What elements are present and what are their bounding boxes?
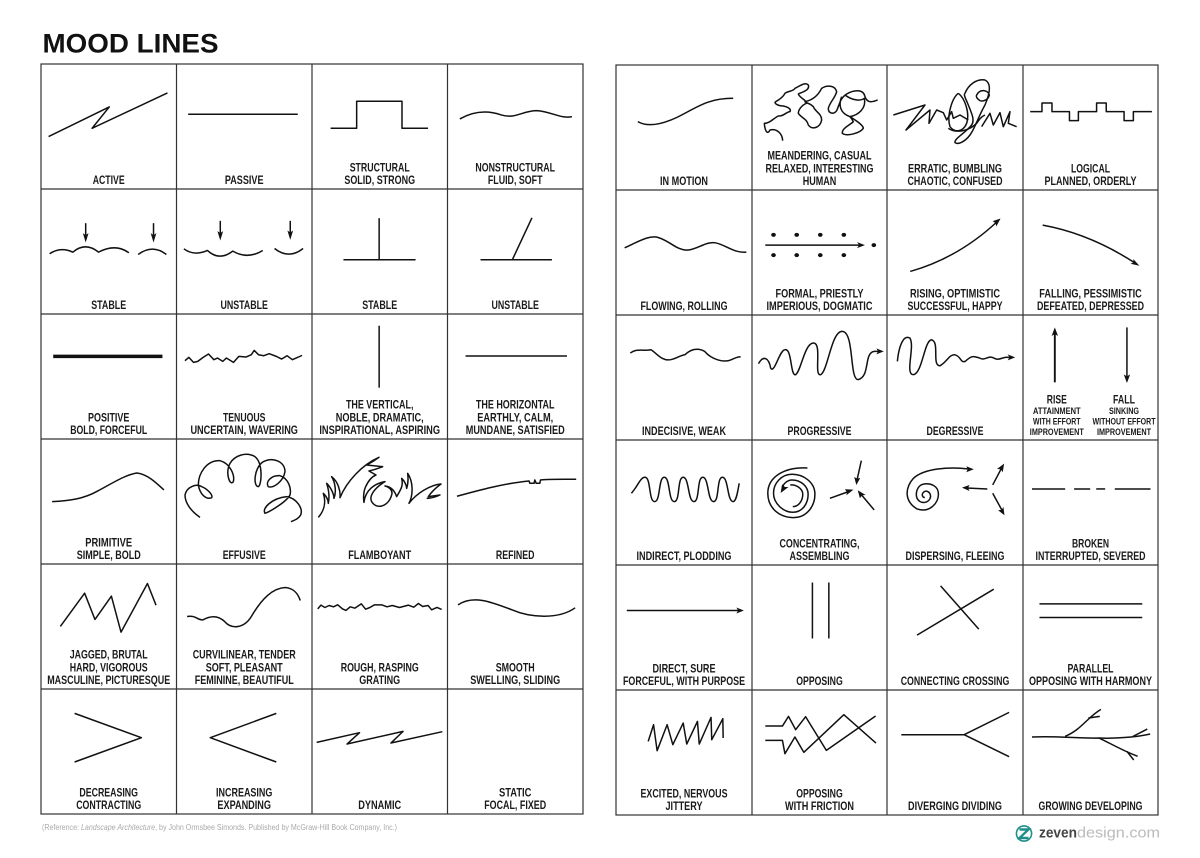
cell: diverging: DIVERGING DIVIDING [908,801,1002,813]
cell: positive: BOLD, FORCEFUL [70,425,147,437]
cell: in motion: IN MOTION [660,176,708,188]
cell: refined: REFINED [496,550,534,562]
cell: primitive [52,473,164,562]
cell: opposing [796,583,843,688]
cell: decreasing: CONTRACTING [76,800,141,812]
cell: progressive: PROGRESSIVE [788,426,852,438]
cell: smooth: SMOOTH [496,662,535,674]
cell: formal: IMPERIOUS, DOGMATIC [766,301,872,313]
cell: dispersing [906,464,1005,563]
cell: rise and fall: IMPROVEMENT [1097,427,1151,438]
cell: static: FOCAL, FIXED [484,800,546,812]
cell: opposing with friction: OPPOSING [796,788,843,800]
cell: rise and fall [1030,327,1156,438]
cell: falling [1037,225,1144,313]
cell: logical [1030,103,1152,188]
cell: opposing with friction [765,715,876,813]
cell: rough [318,603,442,687]
cell: positive [53,356,162,437]
cell: meandering: MEANDERING, CASUAL [768,151,872,163]
cell: jagged: MASCULINE, PICTURESQUE [47,675,170,687]
cell: flowing [625,237,746,313]
cell: rise and fall: FALL [1113,392,1135,406]
cell: flamboyant [318,457,441,562]
cell: indirect: INDIRECT, PLODDING [636,551,732,563]
cell: passive: PASSIVE [225,175,264,187]
cell: nonstructural: FLUID, SOFT [488,175,542,187]
cell: logical: PLANNED, ORDERLY [1044,176,1137,188]
cell: logical: LOGICAL [1071,163,1110,175]
cell: stable arcs [50,223,166,312]
cell: formal [765,233,876,313]
cell: effusive: EFFUSIVE [223,550,266,562]
cell: formal: FORMAL, PRIESTLY [776,288,864,300]
cell: nonstructural [460,111,572,187]
cell: parallel: PARALLEL [1068,663,1114,675]
cell: positive: POSITIVE [88,412,130,424]
cell: connecting crossing: CONNECTING CROSSING [901,676,1009,688]
cell: opposing: OPPOSING [796,676,843,688]
logo: zevendesign [1016,825,1160,842]
cell: flowing: FLOWING, ROLLING [640,301,728,313]
cell: falling: DEFEATED, DEPRESSED [1037,301,1144,313]
title: MOOD LINES [42,28,218,58]
cell: decreasing [75,713,141,812]
cell: direct [623,607,745,688]
cell: rise and fall: ATTAINMENT [1033,406,1081,417]
cell: erratic [893,80,1017,188]
cell: rising: RISING, OPTIMISTIC [910,288,1000,300]
cell: effusive [185,454,301,562]
cell: indirect [631,477,739,563]
cell: parallel [1029,604,1152,688]
cell: concentrating: ASSEMBLING [790,551,850,563]
cell: nonstructural: NONSTRUCTURAL [475,162,555,174]
cell: active: ACTIVE [93,175,125,187]
cell: concentrating: CONCENTRATING, [780,538,860,550]
cell: in motion [638,98,733,188]
cell: tenuous [185,350,302,437]
cell: increasing: EXPANDING [217,800,271,812]
cell: curvilinear [187,588,300,687]
cell: rough: ROUGH, RASPING [341,662,419,674]
cell: unstable leaning: UNSTABLE [491,300,539,312]
cell: jagged: HARD, VIGOROUS [70,662,148,674]
cell: rise and fall: WITH EFFORT [1033,416,1081,428]
wordmark: design.com: design.com [1077,825,1160,842]
cell: structural: STRUCTURAL [350,162,410,174]
cell: smooth: SWELLING, SLIDING [470,675,560,687]
cell: the vertical: THE VERTICAL, [346,400,413,412]
cell: unstable leaning [481,218,552,312]
cell: degressive [897,337,1015,438]
cell: growing: GROWING DEVELOPING [1038,801,1143,813]
cell: growing [1032,709,1150,813]
cell: the horizontal: MUNDANE, SATISFIED [466,425,565,437]
cell: meandering [764,84,878,188]
cell: the vertical [319,326,440,437]
cell: static [484,787,546,812]
cell: curvilinear: CURVILINEAR, TENDER [193,650,296,662]
cell: direct: DIRECT, SURE [652,663,716,675]
cell: flamboyant: FLAMBOYANT [348,550,411,562]
cell: progressive [759,331,884,438]
cell: static: STATIC [499,787,531,799]
cell: rising [908,219,1003,313]
cell: broken: INTERRUPTED, SEVERED [1036,551,1146,563]
cell: stable upright [343,218,416,312]
footnote: reference: (Reference: Landscape Architecture, by John Ormsbee Simonds. Published by McGraw-Hill Book Company, Inc.) [42,823,397,832]
cell: diverging [901,712,1009,813]
cell: unstable arcs: UNSTABLE [220,300,268,312]
cell: rise and fall: RISE [1047,392,1067,406]
cell: the horizontal [466,356,567,437]
cell: increasing [210,713,276,812]
cell: refined [457,479,576,562]
cell: indecisive: INDECISIVE, WEAK [642,426,727,438]
cell: parallel: OPPOSING WITH HARMONY [1029,676,1152,688]
wordmark: zeven: zeven [1039,825,1077,842]
icon: Z badge [1016,826,1032,841]
cell: erratic: ERRATIC, BUMBLING [908,163,1002,175]
cell: tenuous: UNCERTAIN, WAVERING [190,425,298,437]
cell: tenuous: TENUOUS [223,412,266,424]
cell: dynamic [317,731,442,812]
cell: curvilinear: SOFT, PLEASANT [206,662,283,674]
cell: erratic: CHAOTIC, CONFUSED [908,176,1002,188]
cell: indecisive [630,349,741,438]
cell: passive [188,114,298,187]
cell: falling: FALLING, PESSIMISTIC [1039,288,1142,300]
cell: concentrating [768,461,874,563]
cell: curvilinear: FEMININE, BEAUTIFUL [195,675,294,687]
panel: left grid [41,64,583,814]
cell: the vertical: INSPIRATIONAL, ASPIRING [319,425,440,437]
cell: primitive: SIMPLE, BOLD [77,550,141,562]
cell: rise and fall: WITHOUT EFFORT [1092,416,1156,428]
cell: structural: SOLID, STRONG [344,175,415,187]
cell: broken: BROKEN [1072,538,1109,550]
cell: excited [640,717,728,813]
cell: opposing with friction: WITH FRICTION [785,801,854,813]
cell: the horizontal: THE HORIZONTAL [476,400,554,412]
cell: primitive: PRIMITIVE [85,537,132,549]
cell: meandering: HUMAN [803,176,836,188]
cell: smooth [458,600,575,687]
cell: unstable arcs [184,221,303,312]
cell: stable upright: STABLE [362,300,397,312]
cell: stable arcs: STABLE [91,300,126,312]
cell: the horizontal: EARTHLY, CALM, [477,412,553,424]
cell: excited: JITTERY [666,801,703,813]
cell: structural [331,101,428,187]
cell: excited: EXCITED, NERVOUS [640,788,728,800]
cell: the vertical: NOBLE, DRAMATIC, [336,412,424,424]
cell: dynamic: DYNAMIC [358,800,401,812]
cell: jagged: JAGGED, BRUTAL [70,650,148,662]
cell: degressive: DEGRESSIVE [926,426,984,438]
cell: rough: GRATING [359,675,400,687]
cell: increasing: INCREASING [216,787,272,799]
cell: rising: SUCCESSFUL, HAPPY [908,301,1003,313]
cell: rise and fall: IMPROVEMENT [1030,427,1084,438]
cell: broken [1032,489,1150,563]
cell: connecting crossing [901,586,1009,688]
cell: dispersing: DISPERSING, FLEEING [906,551,1005,563]
cell: active [49,93,167,187]
cell: decreasing: DECREASING [79,787,138,799]
panel: right grid [616,65,1158,815]
cell: rise and fall: SINKING [1109,406,1139,417]
cell: jagged [47,584,170,687]
cell: meandering: RELAXED, INTERESTING [766,163,874,175]
cell: direct: FORCEFUL, WITH PURPOSE [623,676,745,688]
